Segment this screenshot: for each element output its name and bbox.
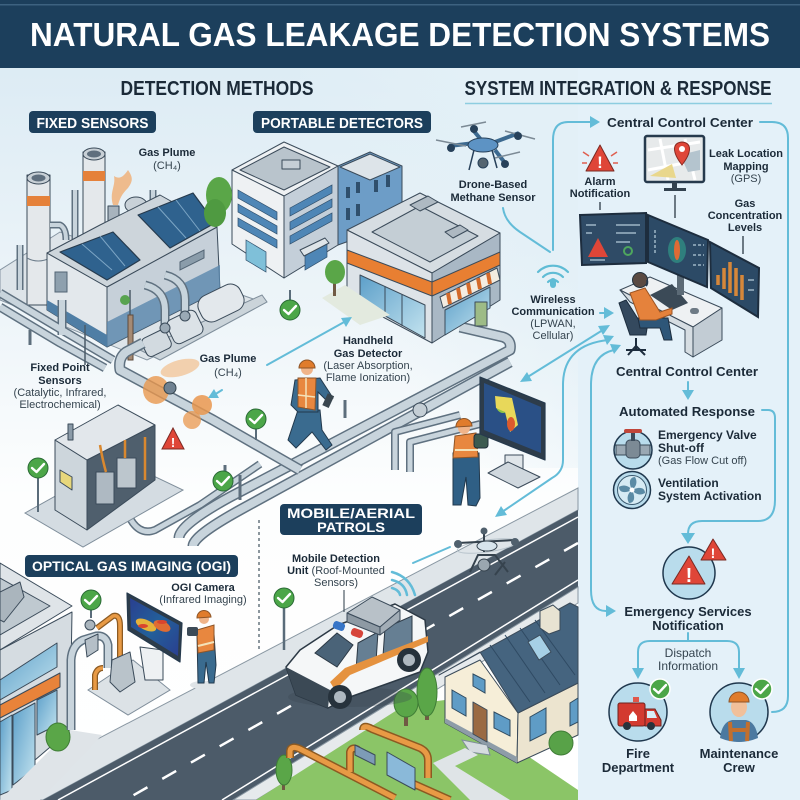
pill: mobile and aerial patrols [280, 504, 422, 535]
pill: optical gas imaging: OPTICAL GAS IMAGING (OGI) [32, 558, 231, 574]
monitor: concentration map [648, 215, 708, 287]
portable detectors storefront [347, 193, 500, 343]
house [439, 603, 578, 763]
label: fire department [602, 746, 675, 775]
label: fire department: Fire [626, 746, 650, 761]
patrol drone [454, 528, 519, 575]
control desk [620, 275, 722, 357]
label: handheld gas detector: Flame Ionization) [326, 372, 410, 384]
wifi icon [538, 266, 568, 288]
office windows [238, 185, 332, 272]
check: supply pipe [213, 471, 233, 491]
label: OGI camera: OGI Camera [171, 582, 236, 594]
maintenance crew icon [710, 683, 768, 742]
label: dispatch information: Information [658, 659, 718, 673]
heading: detection methods: DETECTION METHODS [120, 78, 314, 100]
arrows and flow lines [208, 116, 788, 712]
pill: portable detectors: PORTABLE DETECTORS [261, 115, 423, 132]
label: emergency services notification: Notification [652, 618, 724, 633]
second building [338, 152, 402, 245]
chimney [540, 605, 560, 634]
label: wireless communication: (LPWAN, [530, 318, 576, 330]
check badge: fire [650, 679, 670, 699]
alarm icon: ! [597, 153, 603, 172]
label: drone-based sensor: Methane Sensor [451, 192, 536, 204]
label: fixed point sensors: Sensors [38, 375, 82, 387]
roof sensor box [347, 597, 400, 635]
title: NATURAL GAS LEAKAGE DETECTION SYSTEMS [30, 16, 770, 53]
patrol vehicle [286, 597, 428, 709]
solar roof panels [60, 232, 140, 280]
alarm icon [582, 145, 618, 172]
thermal display monitor [480, 377, 545, 488]
label: wireless communication: Communication [511, 306, 595, 318]
OGI pipes, meter and thermal display [71, 593, 182, 730]
label: central control center top: Central Control Center [607, 115, 753, 130]
main pipeline [30, 327, 510, 546]
label: gas concentration levels: Levels [728, 222, 762, 234]
label: leak location mapping [709, 148, 783, 185]
label: emergency valve: (Gas Flow Cut off) [658, 455, 747, 467]
label: fire department: Department [602, 760, 675, 775]
aerial methane drone [436, 122, 535, 170]
label: handheld gas detector: Handheld [343, 335, 393, 347]
orange gas pipes on lawn [290, 727, 450, 800]
label: handheld gas detector: (Laser Absorption, [323, 360, 413, 372]
smoke plume [112, 170, 132, 205]
label: drone-based sensor: Drone-Based [459, 179, 527, 191]
label: mobile detection unit: Unit (Roof-Mounted [287, 565, 385, 577]
title banner [0, 0, 800, 68]
label: OGI camera: (Infrared Imaging) [159, 594, 247, 606]
pill: mobile and aerial patrols: PATROLS [317, 519, 385, 535]
label: dispatch information: Dispatch [665, 646, 711, 660]
label: mobile detection unit [287, 553, 385, 612]
check: factory [280, 290, 300, 320]
fire truck icon [609, 683, 667, 741]
chimney right [83, 148, 105, 252]
wifi icon near vehicle [392, 572, 415, 595]
office building [232, 142, 338, 278]
label: fixed point sensors [14, 362, 106, 411]
chimney left [27, 172, 50, 305]
control room monitors [580, 213, 759, 317]
label: leak location mapping: Mapping [723, 161, 769, 173]
label: emergency valve [658, 428, 757, 467]
label: dispatch information [658, 646, 718, 673]
monitor: level chart [710, 242, 759, 317]
label: gas concentration levels: Gas [735, 198, 755, 210]
dashed divider [258, 520, 260, 650]
label: ventilation [658, 476, 762, 503]
lawn [256, 700, 578, 800]
label: alarm notification [570, 176, 631, 200]
label: gas plume pipeline: Gas Plume [200, 353, 256, 365]
check: patrol [274, 588, 294, 650]
label: wireless communication: Cellular) [533, 330, 573, 342]
check: pipeline [246, 409, 266, 440]
windows [452, 674, 578, 741]
small tree by store [322, 260, 390, 325]
label: OGI camera [159, 582, 247, 606]
pipes and compressor at factory [0, 275, 267, 368]
label: gas plume pipeline: (CH₄) [214, 367, 242, 379]
label: mobile detection unit: Mobile Detection [292, 553, 380, 565]
label: leak location mapping: (GPS) [731, 173, 761, 185]
fixed sensor poles [85, 290, 130, 365]
status pins [28, 290, 300, 650]
label: ventilation: Ventilation [658, 476, 719, 490]
label: fixed point sensors: (Catalytic, Infrared, [14, 387, 106, 399]
label: gas plume top [139, 147, 195, 172]
trees and bush near house [276, 668, 573, 800]
label: gas plume top: Gas Plume [139, 147, 195, 159]
label: handheld gas detector: Gas Detector [334, 348, 403, 360]
fixed sensor cabinet with gas meters [25, 405, 183, 547]
label: wireless communication: Wireless [530, 294, 576, 306]
emergency alert icon: ! [711, 545, 715, 561]
label: wireless communication [511, 294, 595, 342]
label: fixed point sensors: Fixed Point [30, 362, 90, 374]
label: fixed point sensors: Electrochemical) [19, 399, 101, 411]
warning sign at cabinet [162, 428, 184, 450]
ground platform for factory [0, 232, 265, 360]
ventilation fan icon [614, 472, 650, 508]
pill: fixed sensors: FIXED SENSORS [36, 115, 148, 132]
label: alarm notification: Alarm [584, 176, 616, 188]
label: automated response: Automated Response [619, 404, 755, 419]
label: central control center: Central Control Center [616, 364, 758, 379]
label: gas concentration levels [708, 198, 783, 234]
gas meters [96, 437, 145, 504]
label: ventilation: System Activation [658, 489, 762, 503]
left bottom storefront [0, 563, 102, 800]
label: alarm notification: Notification [570, 188, 631, 200]
factory walls [47, 253, 107, 347]
label: emergency services notification: Emergency Services [624, 604, 752, 619]
label: gas plume top: (CH₄) [153, 160, 181, 172]
warning sign at cabinet: ! [171, 435, 175, 450]
gas plume at pipeline leak [143, 355, 212, 429]
tree behind office [204, 177, 232, 227]
label: drone-based sensor [451, 179, 536, 204]
label: emergency valve: Emergency Valve [658, 428, 757, 442]
OGI inspector worker [187, 610, 216, 689]
pill: optical gas imaging [25, 555, 238, 577]
check: OGI [81, 590, 101, 618]
label: mobile detection unit: Sensors) [314, 577, 358, 589]
monitor: alarm dashboard [580, 213, 646, 265]
valve icon [614, 429, 652, 469]
road and sidewalk [0, 488, 578, 800]
light bar [332, 620, 364, 639]
label: emergency valve: Shut-off [658, 441, 705, 455]
check badge: crew [752, 679, 772, 699]
label: maintenance crew: Maintenance [700, 746, 778, 761]
striped awning [440, 268, 500, 308]
pill: mobile and aerial patrols: MOBILE/AERIAL [287, 505, 416, 521]
map monitor icon [645, 136, 704, 191]
label: gas concentration levels: Concentration [708, 210, 783, 222]
door [473, 702, 487, 742]
factory with chimneys [20, 148, 220, 347]
label: maintenance crew [700, 746, 778, 775]
connector ticks [600, 195, 743, 254]
label: leak location mapping: Leak Location [709, 148, 783, 160]
label: maintenance crew: Crew [723, 760, 756, 775]
operator with chair [619, 272, 672, 355]
label: gas plume pipeline [200, 353, 256, 379]
worker with camera [453, 419, 488, 506]
label: handheld gas detector [323, 335, 413, 384]
compressor tanks [140, 280, 248, 358]
check: cabinet [28, 458, 48, 512]
emergency alert icon [663, 539, 726, 599]
label: emergency services notification [624, 604, 752, 633]
walking worker with handheld detector [288, 360, 334, 450]
emergency alert icon: ! [686, 565, 692, 587]
OGI thermal display [127, 593, 182, 662]
